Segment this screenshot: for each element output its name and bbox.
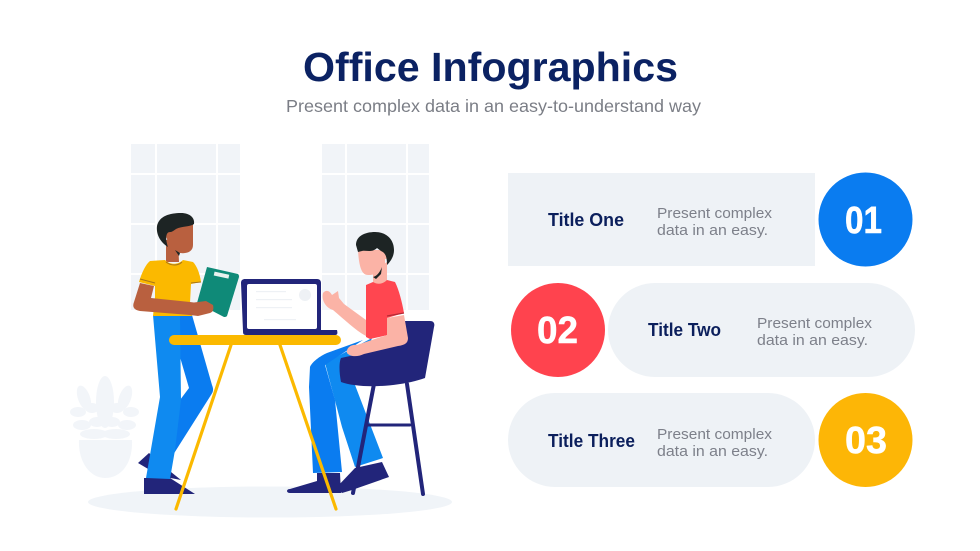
subtitle: Present complex data in an easy-to-understand way (286, 96, 701, 116)
ground shadow (88, 486, 452, 518)
back arm (323, 291, 366, 336)
table legs (176, 345, 336, 509)
panel: item two (511, 283, 915, 377)
table top (169, 335, 341, 345)
window: right (322, 144, 429, 310)
face (358, 250, 385, 275)
item title: Title Three (548, 431, 635, 451)
item title: Title One (548, 210, 624, 230)
item description: data in an easy. (657, 443, 768, 460)
neck (373, 262, 387, 285)
back shoe (138, 453, 181, 480)
item description (657, 426, 773, 460)
item description: Present complex (657, 426, 773, 443)
item title: Title Two (648, 320, 721, 340)
hair (356, 232, 394, 265)
back leg (173, 315, 213, 455)
ear (166, 232, 174, 240)
item description (657, 205, 773, 239)
panel: item three (508, 393, 912, 487)
number badge 03 (818, 393, 912, 487)
front leg (146, 315, 181, 479)
number badge 01: 01 (845, 200, 882, 242)
laptop body (241, 279, 337, 335)
neck (166, 240, 179, 262)
laptop screen (247, 284, 317, 329)
card background (508, 173, 815, 266)
hair (157, 213, 194, 247)
far shoe (336, 462, 389, 493)
item description: data in an easy. (757, 332, 868, 349)
ear (381, 251, 389, 259)
laptop (241, 279, 337, 335)
arm (133, 283, 213, 315)
item description: Present complex (757, 315, 873, 332)
number badge 03: 03 (845, 420, 887, 462)
person: seated man torso (323, 232, 408, 356)
beard (373, 267, 382, 279)
arm (347, 315, 408, 356)
item description: data in an easy. (657, 222, 768, 239)
chair (340, 321, 434, 494)
illustration: office scene (70, 144, 452, 518)
number badge 01 (818, 172, 912, 266)
item description: Present complex (657, 205, 773, 222)
face (167, 222, 193, 253)
title: Office Infographics (303, 44, 678, 90)
person: standing man (133, 213, 239, 494)
card background (508, 393, 815, 487)
table (169, 335, 341, 509)
window: left (131, 144, 240, 310)
near shoe (287, 473, 341, 493)
shirt (366, 280, 404, 339)
front shoe (144, 478, 195, 494)
sleeve and collar trim (140, 262, 201, 283)
item description (757, 315, 873, 349)
number badge 02: 02 (537, 310, 578, 352)
person: seated man legs (287, 338, 389, 493)
number badge 02 (511, 283, 605, 377)
beard (175, 250, 180, 256)
clip (214, 272, 229, 279)
panel: item one (508, 172, 912, 266)
near leg (309, 340, 363, 473)
shirt (139, 260, 201, 316)
card background (608, 283, 915, 377)
chair seat (340, 321, 434, 386)
screen details (256, 289, 311, 320)
icon: potted plant (70, 376, 139, 478)
clipboard (197, 267, 239, 317)
far leg (325, 338, 383, 467)
hand (190, 301, 213, 316)
sleeve cuff (387, 313, 404, 316)
chair legs (353, 384, 423, 494)
